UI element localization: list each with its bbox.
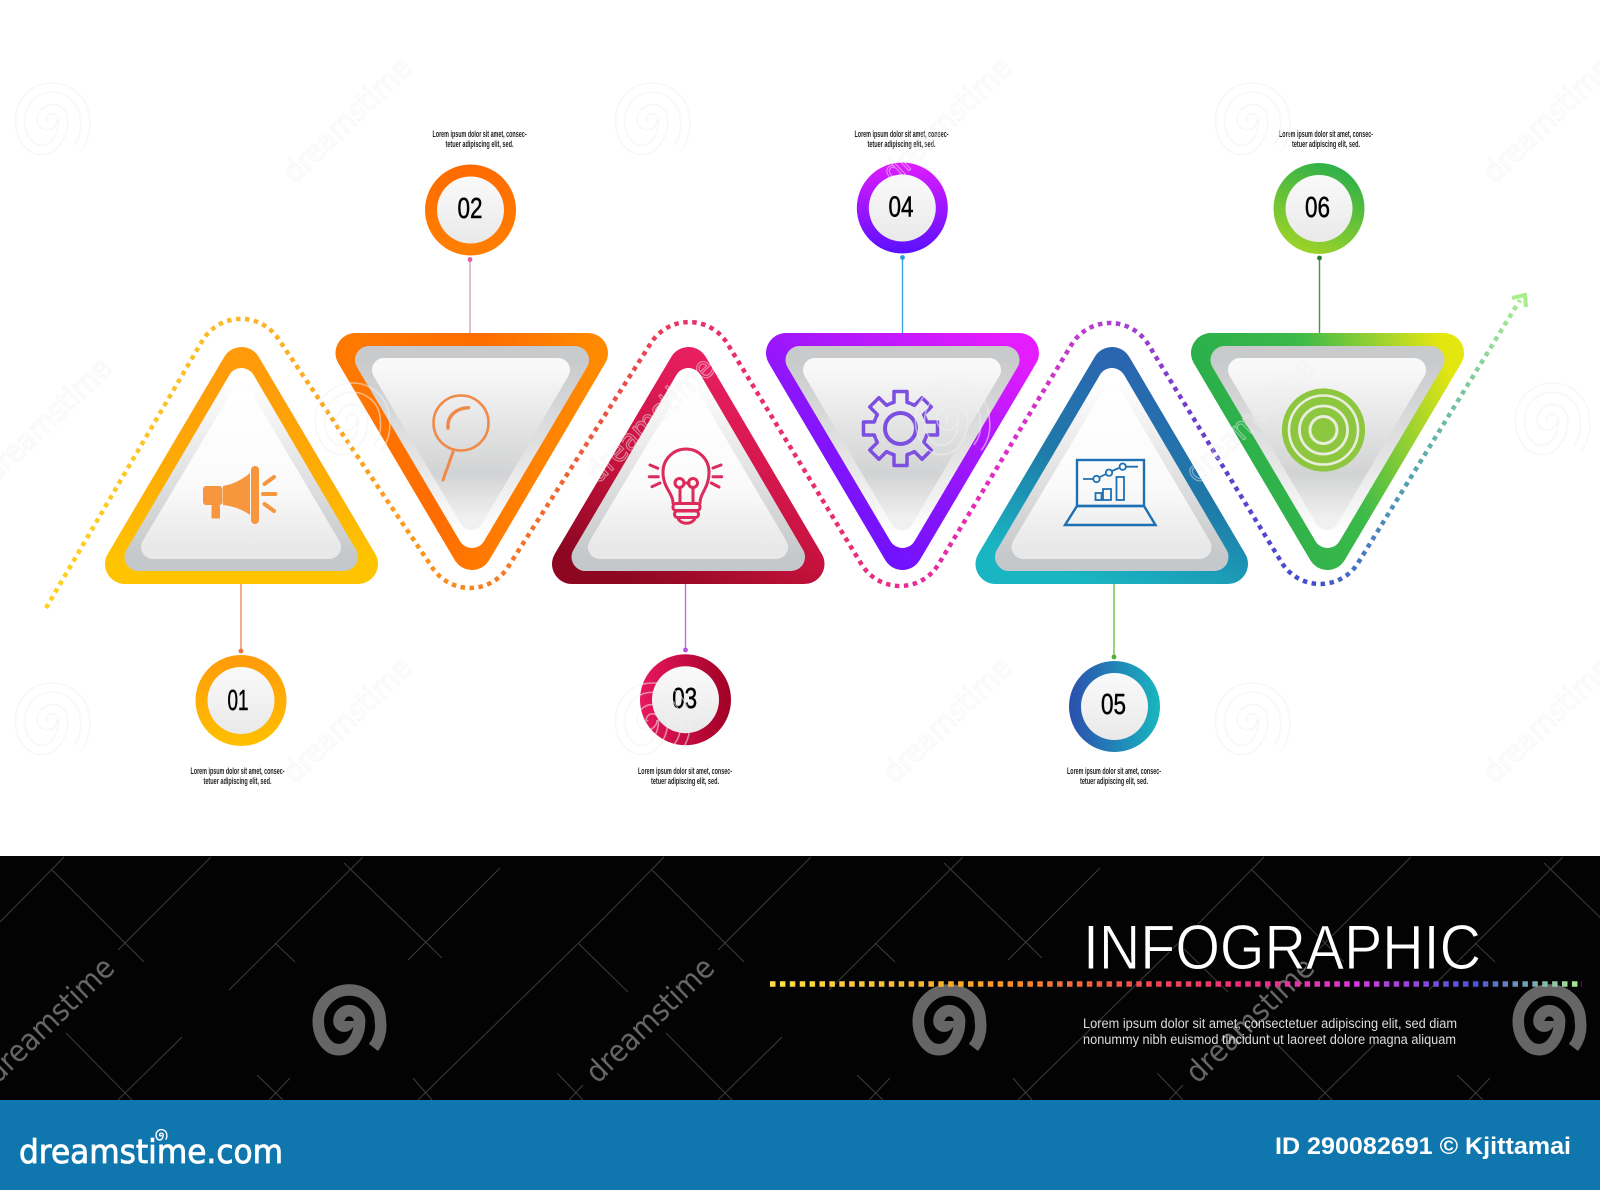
heading: INFOGRAPHIC: INFOGRAPHIC xyxy=(1083,913,1481,983)
panel: black title band xyxy=(0,856,1600,1100)
dark band watermark text: dreamstime xyxy=(1179,950,1322,1090)
marker 02 with connector and caption xyxy=(425,129,526,333)
marker 03 with connector and caption xyxy=(638,584,732,786)
panel: step 02 triangle xyxy=(356,353,588,550)
caption 04: Lorem ipsum dolor sit amet, consec- xyxy=(854,129,948,139)
marker 01 with connector and caption xyxy=(190,584,286,786)
icon: target xyxy=(1282,388,1365,472)
caption 01: tetuer adipiscing elit, sed. xyxy=(204,776,272,786)
caption 05: tetuer adipiscing elit, sed. xyxy=(1080,776,1148,786)
caption 01 xyxy=(190,766,284,786)
icon: magnifying glass xyxy=(434,396,488,480)
number 05: 05 xyxy=(1101,689,1126,721)
caption 02: tetuer adipiscing elit, sed. xyxy=(446,139,514,149)
watermark overlay on white area: dreamstime xyxy=(876,650,1019,790)
watermark overlay on white area: dreamstime xyxy=(876,50,1019,190)
marker 05 with connector and caption xyxy=(1067,584,1161,786)
description text: Lorem ipsum dolor sit amet, consectetuer adipiscing elit, sed diam xyxy=(1083,1016,1457,1031)
caption 06: tetuer adipiscing elit, sed. xyxy=(1292,139,1360,149)
description text: nonummy nibh euismod tincidunt ut laoreet dolore magna aliquam xyxy=(1083,1032,1456,1047)
footer image id: ID 290082691 © Kjittamai xyxy=(1275,1133,1571,1160)
caption 02 xyxy=(432,129,526,149)
watermark overlay on white area: dreamstime xyxy=(579,350,722,490)
number 06: 06 xyxy=(1305,192,1330,224)
watermark overlay on white area: dreamstime xyxy=(276,650,419,790)
dark band spirals xyxy=(318,990,1581,1050)
icon: gear xyxy=(864,392,938,466)
caption 02: Lorem ipsum dolor sit amet, consec- xyxy=(432,129,526,139)
caption 05: Lorem ipsum dolor sit amet, consec- xyxy=(1067,766,1161,776)
description text xyxy=(1083,1016,1457,1047)
number 03: 03 xyxy=(672,683,697,715)
dark band watermark text xyxy=(0,950,1322,1090)
white background xyxy=(0,0,1600,856)
watermark overlay on white area: dreamstime xyxy=(1179,350,1322,490)
panel: step 03 triangle xyxy=(572,367,804,564)
number 01: 01 xyxy=(228,685,248,717)
icon: megaphone xyxy=(203,466,276,524)
caption 06: Lorem ipsum dolor sit amet, consec- xyxy=(1279,129,1373,139)
caption 03: tetuer adipiscing elit, sed. xyxy=(651,776,719,786)
icon: light bulb xyxy=(649,449,722,523)
marker 06 with connector and caption xyxy=(1274,129,1373,333)
panel: blue footer bar xyxy=(0,1100,1600,1190)
caption 05 xyxy=(1067,766,1161,786)
caption 03: Lorem ipsum dolor sit amet, consec- xyxy=(638,766,732,776)
caption 04: tetuer adipiscing elit, sed. xyxy=(868,139,936,149)
caption 03 xyxy=(638,766,732,786)
caption 04 xyxy=(854,129,948,149)
caption 06 xyxy=(1279,129,1373,149)
number 02: 02 xyxy=(458,193,482,225)
watermark overlay on white area xyxy=(320,130,1290,746)
panel: step 05 triangle xyxy=(996,367,1228,564)
rainbow dotted divider xyxy=(770,981,1582,987)
footer logo: dreamstime.com xyxy=(19,1132,283,1171)
marker 04 with connector and caption xyxy=(854,129,948,333)
panel: step 01 triangle xyxy=(125,367,358,564)
panel: step 06 triangle xyxy=(1211,353,1444,550)
panel: step 04 triangle xyxy=(786,353,1019,550)
dotted timeline path with arrow xyxy=(46,295,1526,608)
icon: laptop with chart xyxy=(1065,460,1156,525)
number 04: 04 xyxy=(888,192,914,224)
caption 01: Lorem ipsum dolor sit amet, consec- xyxy=(190,766,284,776)
watermark overlay on white area: dreamstime xyxy=(276,50,419,190)
dark band watermark text: dreamstime xyxy=(579,950,722,1090)
